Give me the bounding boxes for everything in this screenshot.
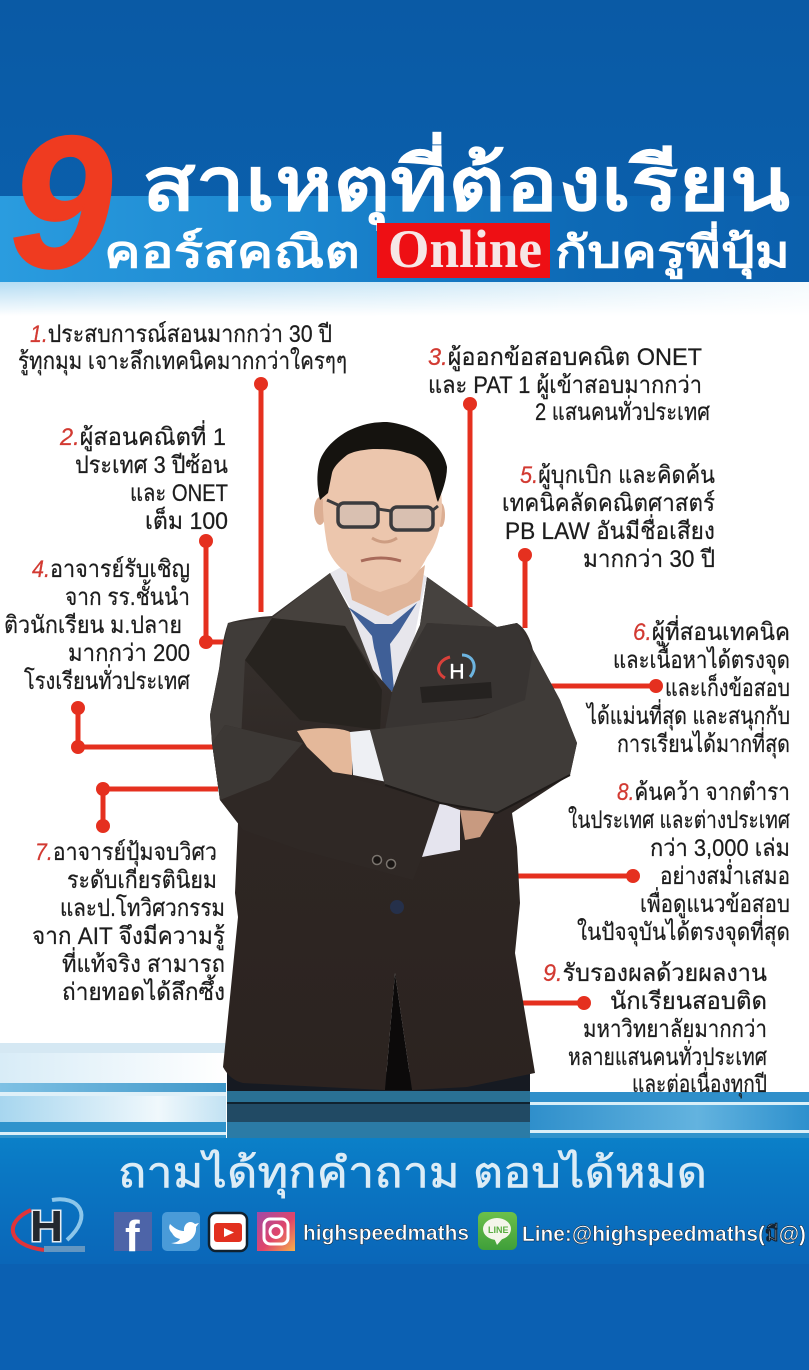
right shirt cuff — [422, 803, 460, 857]
title: second line left: คอร์สคณิต — [104, 227, 360, 277]
left shirt cuff — [350, 730, 387, 782]
text block: reason 5 — [502, 462, 715, 573]
text block: reason 9: หลายแสนคนทั่วประเทศ — [568, 1040, 767, 1071]
text block: reason 6: 6.ผู้ที่สอนเทคนิค — [633, 615, 790, 647]
left shoulder highlight — [210, 618, 272, 760]
text block: reason 1: 1.ประสบการณ์สอนมากกว่า 30 ปี — [30, 320, 332, 348]
text block: reason 3: 2 แสนคนทั่วประเทศ — [535, 395, 710, 426]
text block: reason 7 — [32, 838, 225, 1006]
text block: reason 7: ที่แท้จริง สามารถ — [62, 947, 225, 978]
text block: reason 2: ประเทศ 3 ปีซ้อน — [75, 452, 228, 479]
text block: reason 6 — [585, 615, 790, 759]
text block: reason 5: เทคนิคลัดคณิตศาสตร์ — [502, 489, 715, 517]
trousers — [227, 1072, 530, 1138]
left collar — [272, 573, 373, 670]
text block: reason 8: 8.ค้นคว้า จากตำรา — [617, 779, 790, 806]
text block: reason 5: 5.ผู้บุกเบิก และคิดค้น — [520, 462, 715, 490]
text block: reason 9: นักเรียนสอบติด — [610, 988, 767, 1015]
text block: reason 2: เต็ม 100 — [145, 506, 228, 535]
title: main heading line: สาเหตุที่ต้องเรียน — [142, 131, 790, 231]
text block: reason 4: จาก รร.ชั้นนำ — [65, 579, 190, 611]
text block: reason 4: 4.อาจารย์รับเชิญ — [32, 555, 190, 583]
text block: reason 2 — [59, 420, 228, 535]
badge: Online: Online — [388, 219, 542, 279]
line handle: Line:@highspeedmaths(มี@) — [522, 1222, 806, 1246]
icon: facebook — [114, 1212, 152, 1261]
nose and mouth — [361, 538, 401, 561]
title: big red 9: 9 — [10, 97, 112, 307]
logo: Highspeed Maths — [13, 1199, 85, 1252]
text block: reason 4: มากกว่า 200 — [68, 640, 190, 667]
right collar — [400, 577, 497, 670]
glasses — [327, 500, 438, 530]
left forearm sleeve — [212, 725, 440, 880]
logo: Highspeed Maths: H — [30, 1202, 63, 1251]
text block: reason 3 — [428, 344, 710, 426]
text block: reason 2: และ ONET — [130, 480, 228, 507]
social handle: highspeedmaths — [303, 1222, 469, 1245]
shirt and neck — [330, 560, 427, 700]
text block: reason 4: โรงเรียนทั่วประเทศ — [24, 664, 190, 695]
jacket body — [210, 573, 577, 1090]
dark slit — [385, 973, 412, 1090]
text block: reason 3: และ PAT 1 ผู้เข้าสอบมากกว่า — [428, 372, 702, 400]
text block: reason 8 — [568, 779, 790, 947]
text block: reason 9: มหาวิทยาลัยมากกว่า — [583, 1016, 767, 1043]
figure: teacher in dark jacket with crossed arms — [210, 422, 577, 1138]
text block: reason 1 — [18, 320, 347, 376]
text block: reason 4: ติวนักเรียน ม.ปลาย — [4, 612, 182, 639]
right hand — [460, 810, 495, 840]
icon: facebook: f — [125, 1212, 140, 1261]
text block: reason 7: และป.โทวิศวกรรม — [60, 894, 225, 922]
text block: reason 7: จาก AIT จึงมีความรู้ — [32, 923, 225, 951]
text block: reason 8: กว่า 3,000 เล่ม — [650, 835, 790, 862]
right chest — [385, 623, 540, 730]
icon: line — [478, 1212, 517, 1250]
chest shadow — [245, 618, 382, 730]
text block: reason 3: 3.ผู้ออกข้อสอบคณิต ONET — [428, 344, 702, 372]
buttons — [372, 856, 404, 914]
text block: reason 4 — [4, 555, 190, 695]
tie — [348, 603, 417, 695]
text block: reason 2: 2.ผู้สอนคณิตที่ 1 — [59, 420, 226, 452]
pocket — [420, 682, 492, 703]
jacket logo — [439, 655, 474, 684]
tagline: ถามได้ทุกคำถาม ตอบได้หมด — [118, 1149, 707, 1199]
right forearm sleeve — [370, 650, 577, 813]
hair — [317, 422, 447, 502]
text block: reason 7: ถ่ายทอดได้ลึกซึ้ง — [62, 974, 225, 1006]
left hand — [297, 728, 352, 775]
text block: reason 5: PB LAW อันมีชื่อเสียง — [505, 514, 715, 545]
text block: reason 9: 9.รับรองผลด้วยผลงาน — [543, 960, 767, 987]
text block: reason 1: รู้ทุกมุม เจาะลึกเทคนิคมากกว่าใครๆๆ — [18, 347, 347, 376]
icon: instagram — [257, 1212, 295, 1251]
icon: twitter — [162, 1212, 200, 1251]
icon: youtube — [209, 1213, 247, 1251]
jacket logo: H — [449, 659, 465, 684]
text block: reason 9: และต่อเนื่องทุกปี — [632, 1067, 767, 1099]
ears — [314, 497, 445, 527]
text block: reason 5: มากกว่า 30 ปี — [583, 546, 715, 573]
icon: line: LINE — [488, 1225, 509, 1235]
text block: reason 7: ระดับเกียรตินิยม — [67, 867, 217, 894]
connector lines — [71, 377, 663, 1010]
title: second line right: กับครูพี่ปุ้ม — [555, 221, 790, 280]
text block: reason 7: 7.อาจารย์ปุ้มจบวิศว — [35, 838, 217, 867]
face — [323, 445, 442, 592]
text block: reason 8: อย่างสม่ำเสมอ — [660, 859, 790, 890]
text block: reason 9 — [543, 960, 767, 1099]
